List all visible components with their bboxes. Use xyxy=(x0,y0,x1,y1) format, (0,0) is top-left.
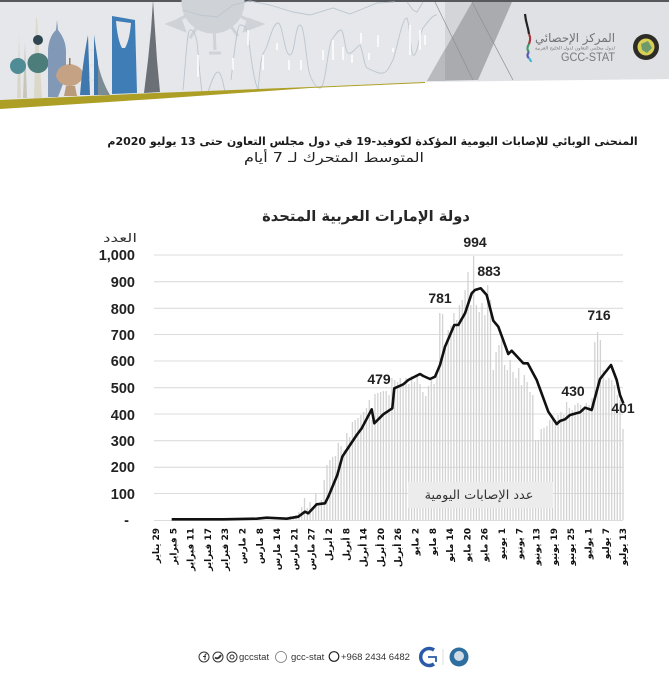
legend label xyxy=(408,482,553,508)
y axis labels: 500 xyxy=(111,381,135,397)
header banner xyxy=(0,0,669,109)
banner background xyxy=(0,2,669,100)
x axis date labels: 7 يونيو xyxy=(515,528,525,560)
data labels: 781 xyxy=(428,290,452,306)
y axis labels: 100 xyxy=(111,487,135,503)
subtitle: المتوسط المتحرك لـ 7 أيام xyxy=(244,149,424,166)
icon: lattice tower xyxy=(48,20,66,97)
phone number: +968 2434 6482 xyxy=(341,652,410,663)
virus illustration xyxy=(166,0,264,53)
icon: TUV seal xyxy=(450,648,468,666)
gold wedge xyxy=(0,82,425,109)
y axis labels: 900 xyxy=(111,275,135,291)
x axis date labels: 21 مارس xyxy=(290,528,300,570)
x axis date labels: 27 مارس xyxy=(308,528,318,570)
x axis date labels: 11 فبراير xyxy=(187,528,197,572)
logo wordmark: GCC-STAT xyxy=(561,50,616,64)
logo Arabic name: المركز الإحصائي xyxy=(535,31,615,46)
x axis date labels: 13 يونيو xyxy=(533,528,543,566)
icon: snapchat xyxy=(276,652,286,662)
x axis date labels: 8 مايو xyxy=(429,528,439,556)
y axis labels: 200 xyxy=(111,460,135,476)
icon: certification G logo xyxy=(421,648,436,665)
x axis date labels: 26 أبريل xyxy=(392,528,404,567)
x axis date labels: 1 يوليو xyxy=(584,528,594,560)
icon: Burj Khalifa xyxy=(144,0,160,93)
y axis labels: 400 xyxy=(111,408,135,424)
grey diagonal bands xyxy=(427,2,512,81)
icon: whatsapp xyxy=(329,652,339,661)
daily cases bars xyxy=(290,256,623,520)
social handle: gccstat xyxy=(239,652,269,663)
y axis labels: 1,000 xyxy=(99,248,135,264)
y axis labels: - xyxy=(124,513,129,529)
data labels: 401 xyxy=(611,400,635,416)
GCC-STAT logo xyxy=(525,14,616,64)
snapchat handle: gcc-stat xyxy=(291,652,325,663)
x axis date labels: 5 فبراير xyxy=(169,528,179,566)
data labels: 883 xyxy=(477,263,501,279)
x axis date labels: 13 يوليو xyxy=(619,528,629,566)
x axis date labels: 14 مايو xyxy=(446,528,456,563)
x axis date labels xyxy=(152,528,629,572)
icons: social media xyxy=(199,652,237,662)
x axis date labels: 2 مارس xyxy=(238,528,248,564)
x axis date labels: 23 فبراير xyxy=(221,528,231,572)
x axis date labels: 20 مايو xyxy=(463,528,473,563)
pale background line charts xyxy=(183,1,423,17)
x axis date labels: 1 يونيو xyxy=(498,528,508,560)
x axis date labels: 8 مارس xyxy=(256,528,266,564)
white bars in background xyxy=(198,25,425,77)
y axis labels: 600 xyxy=(111,354,135,370)
logo Arabic subtitle: لدول مجلس التعاون لدول الخليج العربية xyxy=(535,46,615,52)
icon: Bahrain World Trade Center xyxy=(80,35,110,95)
moving average line xyxy=(172,288,623,519)
x axis date labels: 29 يناير xyxy=(152,528,162,564)
x axis date labels: 20 أبريل xyxy=(375,528,387,567)
y axis unit: العدد xyxy=(103,231,137,245)
x axis date labels: 2 مايو xyxy=(412,528,422,556)
icon: Kuwait towers xyxy=(10,18,48,98)
x axis date labels: 14 أبريل xyxy=(358,528,370,567)
y axis labels: 300 xyxy=(111,434,135,450)
skyline buildings xyxy=(10,0,160,98)
icon: domed building xyxy=(56,58,84,96)
footer contact bar xyxy=(199,648,468,666)
x axis date labels: 25 يونيو xyxy=(567,528,577,566)
x axis date labels: 17 فبراير xyxy=(204,528,214,572)
x axis date labels: 14 مارس xyxy=(273,528,283,570)
chart title: دولة الإمارات العربية المتحدة xyxy=(262,208,470,225)
legend label: عدد الإصابات اليومية xyxy=(425,488,533,503)
main title: المنحنى الوبائي للإصابات اليومية المؤكدة لكوفيد-19 في دول مجلس التعاون حتى 13 يوليو 2020م xyxy=(107,135,638,148)
icon: Kingdom Centre xyxy=(112,16,137,94)
y axis labels: 700 xyxy=(111,328,135,344)
data labels: 994 xyxy=(463,234,487,250)
data labels: 430 xyxy=(561,383,585,399)
x axis date labels: 26 مايو xyxy=(481,528,491,563)
y axis labels: 800 xyxy=(111,302,135,318)
y axis labels xyxy=(99,248,135,529)
x axis date labels: 7 يوليو xyxy=(602,528,612,560)
icon: coloured logo ribbons xyxy=(525,14,531,62)
x axis date labels: 8 أبريل xyxy=(340,528,352,561)
chart: daily cases and 7-day moving average xyxy=(99,231,635,572)
x axis date labels: 2 أبريل xyxy=(323,528,335,561)
icon: GCC emblem xyxy=(633,34,659,60)
grid lines xyxy=(154,255,623,520)
x axis date labels: 19 يونيو xyxy=(550,528,560,566)
data labels: 479 xyxy=(367,371,391,387)
data labels xyxy=(367,234,635,416)
data labels: 716 xyxy=(587,307,611,323)
